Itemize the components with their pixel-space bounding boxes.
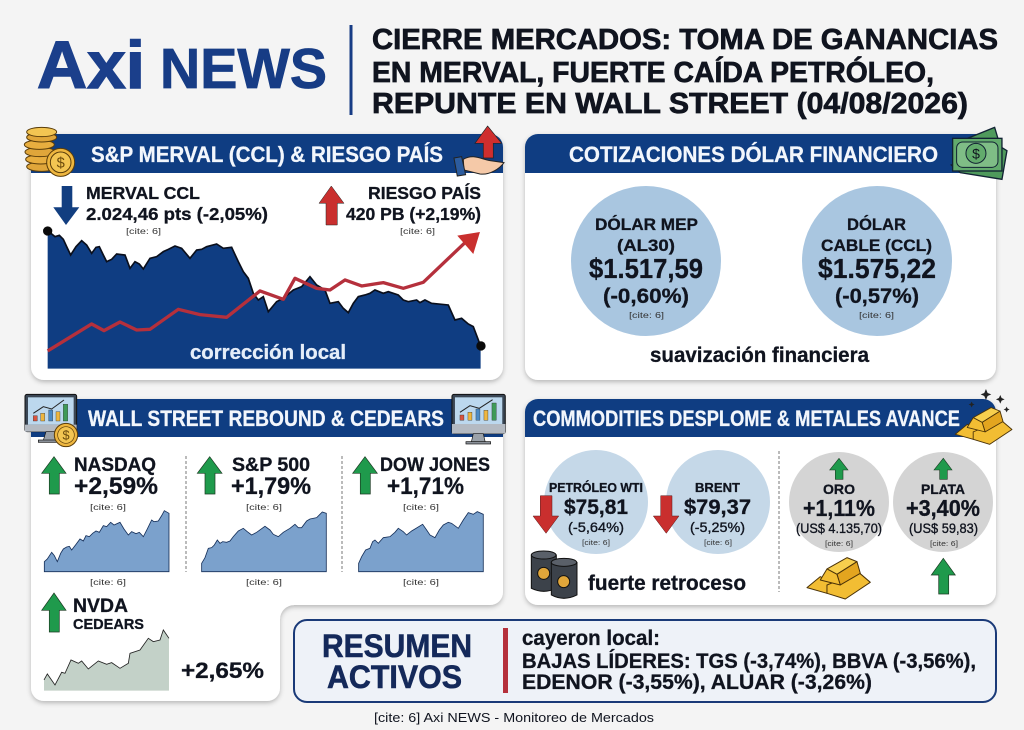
title: REPUNTE EN WALL STREET (04/08/2026): [372, 88, 968, 120]
panel header: Merval: S&P MERVAL (CCL) & RIESGO PAÍS: [91, 142, 443, 167]
icon: monitor with coin: [25, 394, 78, 447]
circle: dólar MEP: [cite: 6]: [629, 310, 664, 320]
icon: gold bars in header: [955, 408, 1012, 444]
circle: oro: [789, 452, 889, 552]
icon: sparkles: [969, 389, 1010, 412]
panel header: dólar: COTIZACIONES DÓLAR FINANCIERO: [569, 142, 938, 167]
circle: Brent: (-5,25%): [690, 519, 745, 535]
icon: hand with red arrow: [454, 126, 504, 176]
stat: Dow Jones: DOW JONES: [380, 454, 490, 476]
caption: corrección local: corrección local: [190, 342, 346, 364]
stat: NVDA: CEDEARS: [73, 617, 144, 633]
arrow: WTI down: [533, 496, 559, 533]
arrow: plata up: [931, 558, 955, 594]
panel header: Merval: [31, 134, 503, 173]
text: riesgo país: [cite: 6]: [400, 226, 435, 236]
circle: oro: (US$ 4.135,70): [796, 520, 882, 536]
circle: petróleo WTI: [cite: 6]: [582, 540, 610, 547]
chart: Merval area and riesgo país line: [43, 226, 486, 369]
circle: dólar cable: [cite: 6]: [859, 310, 894, 320]
stat: NASDAQ: [42, 454, 158, 587]
chart: S&P 500: [202, 512, 326, 572]
title: EN MERVAL, FUERTE CAÍDA PETRÓLEO,: [372, 55, 934, 89]
text: Merval CCL: 2.024,46 pts (-2,05%): [86, 204, 268, 224]
circle: dólar cable: [802, 186, 952, 336]
icon: coins: $: [57, 156, 65, 172]
panel header: commodities: [525, 399, 996, 437]
stat: Dow Jones: +1,71%: [387, 473, 464, 500]
circle: dólar MEP: $1.517,59: [589, 253, 703, 284]
stat: NASDAQ: [cite: 6]: [90, 577, 126, 587]
panel header: Wall Street: [31, 399, 503, 437]
icon: gold bars: [807, 558, 870, 599]
icon: monitor: [452, 394, 505, 444]
title: [372, 24, 998, 120]
text: bajas líderes: cayeron local:: [522, 627, 660, 650]
circle: dólar MEP: (AL30): [617, 236, 675, 255]
circle: plata: (US$ 59,83): [909, 520, 978, 536]
circle: dólar cable: DÓLAR: [847, 215, 906, 234]
panel: commodities: [525, 389, 1012, 605]
panel header: Wall Street: WALL STREET REBOUND & CEDEARS: [88, 406, 444, 431]
circle: dólar MEP: [571, 186, 721, 336]
circle: petróleo WTI: $75,81: [564, 496, 628, 519]
stat value: NVDA: +2,65%: [181, 658, 264, 683]
caption: fuerte retroceso: fuerte retroceso: [588, 572, 746, 595]
circle: petróleo WTI: (-5,64%): [568, 519, 624, 535]
arrow: Merval down: [53, 186, 79, 225]
circle: plata: PLATA: [921, 481, 965, 497]
icon: banknotes: $: [972, 146, 980, 162]
panel: Wall Street: [25, 394, 505, 701]
icon: banknotes: [951, 127, 1007, 179]
arrow: riesgo país up: [319, 186, 344, 225]
panel: cotizaciones dólar financiero: [525, 127, 1007, 380]
text: riesgo país: [346, 182, 481, 236]
icon: coins: [24, 127, 75, 176]
circle: dólar cable: (-0,57%): [835, 285, 919, 308]
circle: dólar cable: CABLE (CCL): [821, 236, 932, 255]
stat: NVDA: [42, 593, 144, 633]
circle: dólar cable: $1.575,22: [818, 253, 936, 284]
text: Merval CCL: [86, 183, 268, 236]
text: bajas líderes: EDENOR (-3,55%), ALUAR (-3,26%): [522, 671, 872, 694]
circle: oro: [cite: 6]: [825, 541, 853, 548]
stat: Dow Jones: [353, 454, 490, 587]
circle: dólar MEP: DÓLAR MEP: [595, 215, 698, 234]
stat: NASDAQ: +2,59%: [74, 473, 158, 500]
stat: S&P 500: +1,79%: [231, 473, 311, 500]
stat: NASDAQ: NASDAQ: [74, 454, 156, 476]
chart: Dow Jones: [359, 512, 483, 572]
stat: Dow Jones: [cite: 6]: [403, 577, 439, 587]
chart: NVDA: [44, 630, 169, 691]
panel: resumen activos: [294, 620, 996, 702]
text: bajas líderes: [522, 627, 976, 694]
circle: plata: [893, 452, 993, 552]
stat: S&P 500: [197, 454, 311, 587]
stat: NASDAQ: [cite: 6]: [90, 502, 126, 512]
panel: S&P Merval y riesgo país: [24, 126, 504, 380]
icon: monitor with coin: $: [62, 429, 70, 443]
logo: Axi NEWS: NEWS: [160, 37, 327, 101]
footer: [cite: 6] Axi NEWS - Monitoreo de Mercados: [374, 710, 655, 725]
arrow: Brent down: [653, 496, 679, 533]
panel header: dólar: [525, 134, 996, 173]
heading: resumen activos: [322, 628, 472, 695]
caption: suavización financiera: suavización financiera: [650, 344, 869, 367]
stat: Dow Jones: [cite: 6]: [403, 502, 439, 512]
circle: plata: +3,40%: [906, 495, 980, 521]
heading: resumen activos: ACTIVOS: [327, 659, 462, 695]
circle: petróleo WTI: [544, 450, 648, 554]
circle: oro: +1,11%: [803, 495, 875, 521]
stat: S&P 500: [cite: 6]: [246, 577, 282, 587]
icon: oil barrels: [531, 551, 577, 598]
circle: Brent: BRENT: [695, 480, 740, 495]
title: CIERRE MERCADOS: TOMA DE GANANCIAS: [372, 24, 998, 56]
chart: NASDAQ: [44, 511, 169, 572]
circle: Brent: [666, 450, 770, 554]
stat: NVDA: NVDA: [73, 596, 128, 617]
circle: Brent: [cite: 6]: [704, 540, 732, 547]
circle: dólar MEP: (-0,60%): [603, 285, 689, 308]
logo: Axi NEWS: [37, 28, 327, 103]
circle: plata: [cite: 6]: [930, 541, 958, 548]
text: riesgo país: RIESGO PAÍS: [368, 182, 481, 203]
text: Merval CCL: MERVAL CCL: [86, 183, 200, 203]
stat: S&P 500: [cite: 6]: [246, 502, 282, 512]
text: Merval CCL: [cite: 6]: [126, 226, 161, 236]
circle: petróleo WTI: PETRÓLEO WTI: [549, 480, 643, 495]
stat: S&P 500: S&P 500: [232, 454, 310, 476]
text: riesgo país: 420 PB (+2,19%): [346, 204, 481, 224]
text: bajas líderes: BAJAS LÍDERES: TGS (-3,74%), BBVA (-3,56%),: [522, 650, 976, 673]
circle: oro: ORO: [823, 481, 855, 497]
heading: resumen activos: RESUMEN: [322, 628, 472, 664]
circle: Brent: $79,37: [684, 496, 751, 519]
logo: Axi NEWS: Axi: [37, 28, 145, 103]
